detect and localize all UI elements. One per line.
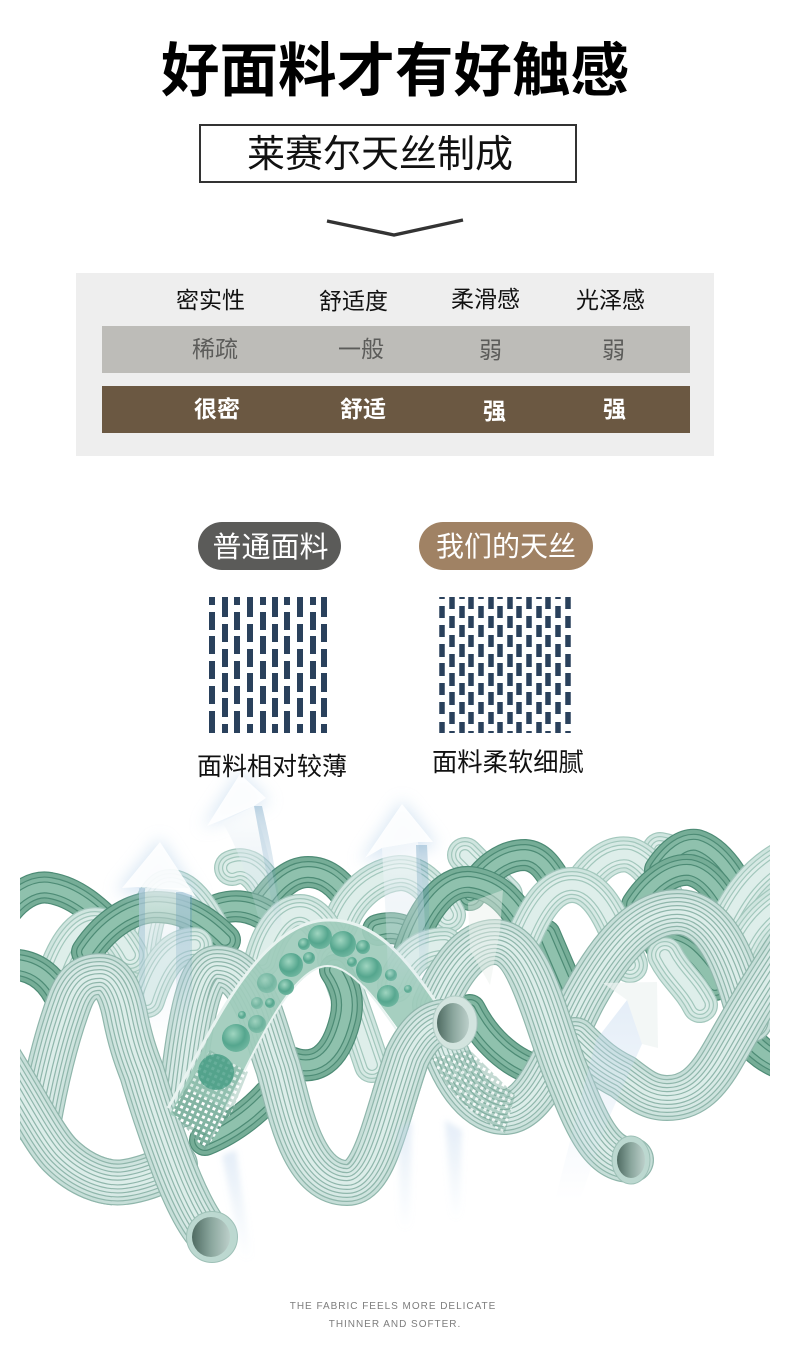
mesh cutaway fibre with bubbles (168, 920, 438, 1150)
arrow: translucent upper right (468, 890, 503, 985)
arrow: middle rising (208, 774, 279, 920)
rising air wisps (222, 1122, 463, 1225)
tencel: strong 2: 强 (603, 396, 626, 422)
pill label: our tencel: 我们的天丝 (436, 531, 576, 562)
table header: gloss: 光泽感 (576, 287, 645, 313)
caption: our tencel: 面料柔软细腻 (432, 749, 584, 777)
subtitle text: 莱赛尔天丝制成 (247, 134, 513, 176)
open fibre end: bottom left (186, 1212, 238, 1262)
arrow glows (116, 772, 438, 900)
back green fibres (0, 845, 748, 945)
open fibre end: centre (433, 996, 477, 1050)
lower green fibres (205, 944, 785, 1140)
tencel: strong 1: 强 (483, 398, 506, 424)
table header: density: 密实性 (176, 287, 245, 313)
bottom-left fibre passing over the first leg (20, 1060, 112, 1206)
inner pale loop (665, 955, 700, 1005)
arrow: right rising (366, 804, 432, 980)
weave pattern: ordinary fabric (212, 597, 324, 733)
title: 好面料才有好触感 (161, 39, 629, 104)
mesh section on right fibre (432, 1050, 515, 1133)
pill: our tencel (419, 522, 593, 570)
tencel: dense: 很密 (194, 396, 240, 422)
front fibres (0, 912, 790, 1237)
fibre illustration (0, 772, 790, 1262)
middle green fibres (5, 870, 745, 1010)
back pale fibres (55, 873, 448, 975)
tencel: comfortable: 舒适 (340, 396, 386, 422)
ordinary: sparse: 稀疏 (192, 336, 238, 362)
pill: ordinary fabric (198, 522, 341, 570)
weave pattern: our tencel (442, 597, 568, 733)
ordinary: average: 一般 (338, 336, 384, 362)
middle pale fibres (147, 860, 785, 1065)
back pale fibre ends (232, 850, 700, 905)
table header: comfort: 舒适度 (319, 288, 388, 314)
caption: ordinary fabric: 面料相对较薄 (197, 753, 347, 781)
table header: smoothness: 柔滑感 (451, 286, 520, 312)
fibre rising to centre open end, over the mesh (372, 999, 443, 1130)
icon: chevron divider (326, 218, 464, 237)
row: ordinary fabric (102, 326, 690, 373)
footer line 2: THINNER AND SOFTER. (329, 1319, 461, 1330)
arrow: left rising (122, 842, 196, 1016)
weave patterns and fibre illustration (20, 597, 770, 1263)
arrow: lower right translucent (570, 982, 658, 1146)
panel: comparison table (76, 273, 714, 456)
open fibre end: bottom right (612, 1136, 650, 1184)
subtitle box (199, 124, 577, 183)
ordinary: weak 1: 弱 (479, 337, 502, 363)
row: our tencel (102, 386, 690, 433)
pill label: ordinary fabric: 普通面料 (212, 532, 328, 564)
ordinary: weak 2: 弱 (602, 337, 625, 363)
footer line 1: THE FABRIC FEELS MORE DELICATE (290, 1301, 496, 1312)
